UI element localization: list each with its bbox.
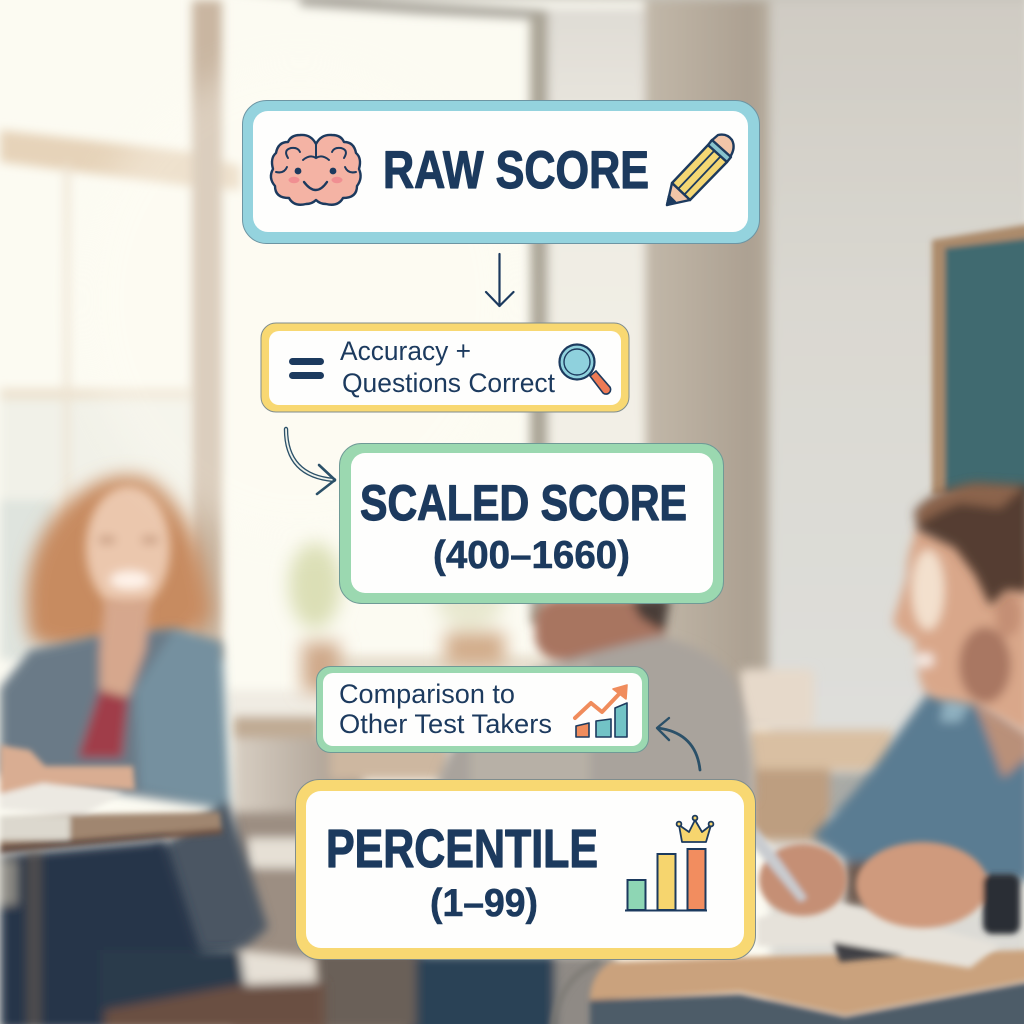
- heading: percentile: PERCENTILE: [326, 819, 598, 879]
- panel: comparison to other test takers: [316, 666, 648, 752]
- icon: smiling brain: [271, 135, 361, 205]
- panel: scaled score: [340, 444, 724, 604]
- blurred man on the right: [552, 482, 1024, 1024]
- face: [86, 486, 170, 610]
- icon: equals sign: [289, 358, 324, 379]
- chalkboard on the wall: [932, 224, 1024, 495]
- text: comparison to other test takers: Other Test Takers: [339, 709, 552, 739]
- text: accuracy plus questions correct: Accuracy +: [340, 336, 471, 366]
- arrow: curved into scaled score: [286, 429, 335, 494]
- heading: scaled score: SCALED SCORE: [360, 475, 687, 531]
- hair: [26, 475, 212, 650]
- text: accuracy plus questions correct: [340, 336, 555, 398]
- shirt: [812, 690, 1024, 906]
- arrow: curved up to comparison: [657, 718, 700, 770]
- jacket and red top: [0, 600, 268, 960]
- desk: [552, 950, 1024, 1024]
- panel: raw score: [242, 100, 760, 244]
- soft window glow: [80, 60, 520, 540]
- back furniture: [740, 669, 893, 841]
- blurred centre student: [316, 598, 755, 1024]
- jeans, table leg and chair: [0, 840, 325, 1024]
- hands, pen and watch: [752, 825, 1020, 934]
- arrow: raw score down to accuracy: [486, 254, 514, 306]
- panel: percentile: [296, 780, 756, 960]
- blurred plants and pots: [289, 541, 505, 692]
- icon: magnifying glass: [560, 344, 611, 394]
- text: accuracy plus questions correct: Questions Correct: [342, 368, 555, 398]
- text: range 400 to 1660: (400–1660): [433, 534, 630, 577]
- blurred woman on the left: [0, 475, 325, 1024]
- icon: bar chart with crown: [625, 816, 713, 910]
- notebook: [757, 902, 1000, 968]
- heading: raw score: RAW SCORE: [383, 141, 649, 200]
- arms, book and table: [0, 745, 222, 854]
- icon: rising chart: [575, 685, 627, 737]
- panel: accuracy and questions correct: [261, 323, 629, 412]
- icon: crown: [677, 816, 713, 842]
- text: comparison to other test takers: Comparison to: [339, 679, 515, 709]
- text: comparison to other test takers: [339, 679, 552, 739]
- face and ear: [893, 525, 1024, 735]
- icon: pencil: [667, 135, 734, 205]
- text: range 1 to 99: (1–99): [430, 882, 538, 925]
- hair: [914, 482, 1024, 606]
